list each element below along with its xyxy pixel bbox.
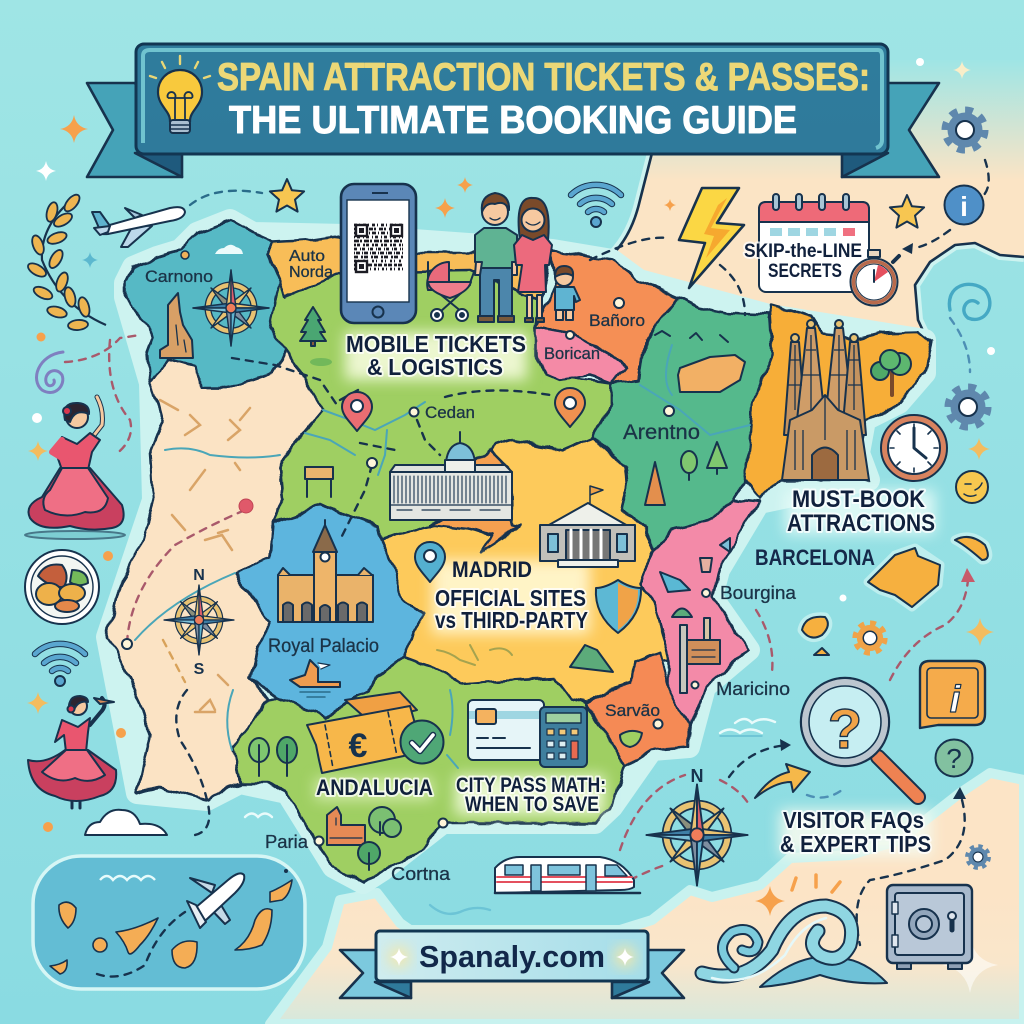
banner ribbon tail: right (842, 83, 939, 177)
icon: calculator (540, 707, 587, 767)
Arentno details (645, 331, 745, 505)
text glow patches (315, 332, 935, 856)
icon: palace (390, 432, 512, 520)
section title: Visitor FAQs & Expert Tips (780, 807, 931, 857)
Balearic Islands (802, 537, 988, 655)
section title: City Pass Math: CITY PASS MATH: (456, 774, 606, 797)
map of Spain regions (107, 220, 932, 883)
icon: family with stroller (427, 193, 580, 322)
small Galicia details (181, 251, 332, 366)
icon: wave (702, 906, 887, 987)
icon: factory on Valencia coast (680, 618, 720, 693)
icon: tree Catalonia (871, 350, 911, 395)
region: Arentno (592, 297, 772, 550)
section title: Official Sites vs Third-Party (435, 585, 588, 633)
icon: airplane (92, 207, 185, 247)
section title: Official Sites vs Third-Party: vs THIRD-PARTY (435, 607, 588, 633)
banner ribbon tail: left (87, 83, 182, 177)
city labels: Carnono (145, 267, 213, 286)
region: central orange (430, 450, 520, 553)
section label: Madrid: MADRID (452, 557, 532, 582)
pine (707, 442, 727, 474)
land: north Africa coast (270, 773, 1024, 1024)
icon: compass right (646, 766, 748, 886)
Castilla terrain marks (437, 645, 613, 672)
icon: food plate (25, 550, 99, 624)
icon: info circle: i (960, 191, 968, 222)
footer ribbon: Spanaly.com: Spanaly.com (419, 939, 605, 974)
icon: compass Portugal: N (193, 567, 205, 584)
icon: pine tree (300, 307, 326, 346)
icon: green check (400, 720, 444, 764)
region: Valencia (639, 500, 759, 727)
icon: credit card (468, 700, 544, 760)
icon: yellow curved arrow (755, 764, 810, 798)
icon: euro ticket (307, 692, 423, 773)
icon: smiling face (956, 471, 988, 503)
banner plate (136, 44, 888, 154)
islands (50, 880, 292, 974)
QR code (354, 225, 403, 269)
sea wave marks (245, 719, 775, 914)
region: Catalonia (745, 305, 932, 500)
section title: Mobile Tickets & Logistics: MOBILE TICKETS (346, 331, 526, 357)
section title: Official Sites vs Third-Party: OFFICIAL SITES (435, 585, 586, 611)
icon: light bulb (150, 56, 210, 133)
icon: orange info speech box (920, 661, 985, 728)
map pin: red (342, 392, 372, 431)
city labels: Bourgina (720, 583, 797, 603)
icon: euro ticket: € (349, 727, 368, 765)
city labels: Royal Palacio (268, 636, 379, 657)
icon: compass right: N (690, 766, 704, 786)
section title: Must-Book Attractions: MUST-BOOK (792, 486, 926, 513)
city labels: Cedan (425, 403, 475, 422)
title text: THE ULTIMATE BOOKING GUIDE (229, 99, 797, 142)
icon: small trees Andalucia (249, 737, 297, 776)
section title: Visitor FAQs & Expert Tips: VISITOR FAQs (783, 807, 924, 833)
icon: lightning bolt (679, 188, 744, 288)
icon: shield (596, 580, 641, 633)
icon: tower of Hercules (160, 293, 193, 358)
city labels: Bañoro (589, 311, 645, 330)
section title: Mobile Tickets & Logistics (346, 331, 526, 380)
icon: cloud (85, 810, 167, 835)
icon: wifi top (571, 185, 621, 227)
city dots (122, 298, 897, 846)
icon: magnifying glass with question mark (801, 678, 918, 797)
icon: high-speed train (495, 857, 640, 893)
title text: SPAIN ATTRACTION TICKETS & PASSES: (217, 56, 870, 99)
spire (645, 462, 665, 505)
icon: orange info speech box: i (950, 679, 962, 721)
icon: phone with QR code (341, 184, 416, 323)
figure: mother (514, 198, 552, 322)
region: Galicia (125, 220, 287, 387)
panel: Canary Islands inset (33, 856, 305, 989)
city labels: Norda (289, 264, 333, 281)
icon: stopwatch (850, 250, 899, 306)
icon: compass Galicia (193, 270, 269, 346)
region: green north (270, 265, 612, 540)
city labels: Maricino (716, 679, 790, 699)
region: Castilla yellow (380, 437, 669, 703)
icon: calendar (759, 194, 869, 292)
icon: teal spiral in east sea (949, 284, 990, 319)
footer ribbon: Spanaly.com (340, 931, 684, 998)
icon: flamenco dancer upper (25, 397, 125, 539)
icon: spiral (37, 352, 63, 392)
land: southern France coast (612, 60, 1024, 335)
region: Borican (535, 327, 625, 383)
icon: green question circle (936, 740, 972, 776)
icon: Greek museum building (540, 486, 635, 567)
icon: info circle (944, 186, 984, 224)
icon: magnifying glass with question mark: ? (828, 697, 862, 760)
Murcia leaf mark (620, 731, 642, 747)
icon: wifi left (35, 644, 85, 686)
section title: City Pass Math (456, 774, 606, 816)
icon: stroller (427, 262, 474, 321)
map pin: blue (415, 542, 445, 582)
city labels: Borican (544, 344, 600, 363)
city labels: Arentno (623, 421, 700, 444)
section title: Skip-the-Line Secrets: SECRETS (768, 261, 842, 282)
section title: Must-Book Attractions: ATTRACTIONS (787, 510, 935, 537)
city labels (145, 248, 797, 884)
city labels: Auto (289, 248, 325, 265)
section title: Must-Book Attractions (787, 486, 935, 537)
title text (217, 56, 870, 142)
icon: green question circle: ? (946, 743, 962, 774)
section label: Andalucia: ANDALUCIA (316, 775, 433, 800)
region: Portugal (107, 350, 323, 800)
icon: safe (887, 885, 972, 969)
icon: flamenco dancer lower (28, 696, 116, 808)
section title: Skip-the-Line Secrets: SKIP-the-LINE (744, 241, 862, 262)
title banner (87, 44, 939, 177)
city labels: Paria (265, 832, 309, 852)
section title: Mobile Tickets & Logistics: & LOGISTICS (367, 354, 503, 380)
region: Murcia (585, 653, 689, 767)
dashed route lines (65, 160, 989, 945)
icon: royal palace (278, 520, 373, 622)
city labels: Cortna (391, 864, 451, 884)
icon: gears (855, 110, 989, 868)
icon: Sagrada Familia (782, 320, 869, 480)
region: Extremadura (235, 503, 423, 717)
icon: wall clock (881, 415, 947, 481)
section title: Skip-the-Line Secrets (744, 241, 862, 282)
icon: Alcazar with trees (327, 807, 401, 870)
region: Bañoro (535, 250, 679, 383)
Portugal sketch marks (160, 400, 250, 712)
region: Andalucia (233, 657, 625, 883)
city labels: Sarvão (605, 701, 660, 720)
section title: Visitor FAQs & Expert Tips: & EXPERT TIPS (780, 831, 931, 857)
icon: laurel branch (26, 192, 106, 331)
figure: father (475, 193, 517, 322)
map pin: orange (555, 388, 585, 427)
icon: small cloud on Galicia (215, 245, 243, 254)
region: Asturias (267, 235, 552, 300)
section title: City Pass Math: WHEN TO SAVE (465, 793, 599, 816)
tree (681, 451, 697, 480)
Valencia marks (660, 538, 730, 617)
icon: airplane inset (187, 873, 244, 928)
figure: child (555, 266, 580, 320)
icon: compass Portugal: S (194, 661, 205, 678)
Extremadura lake mark (290, 660, 340, 697)
icon: wooden sign (305, 467, 333, 497)
icon: compass Portugal (164, 567, 234, 678)
rivers (135, 345, 750, 768)
label: Barcelona: BARCELONA (755, 545, 875, 570)
